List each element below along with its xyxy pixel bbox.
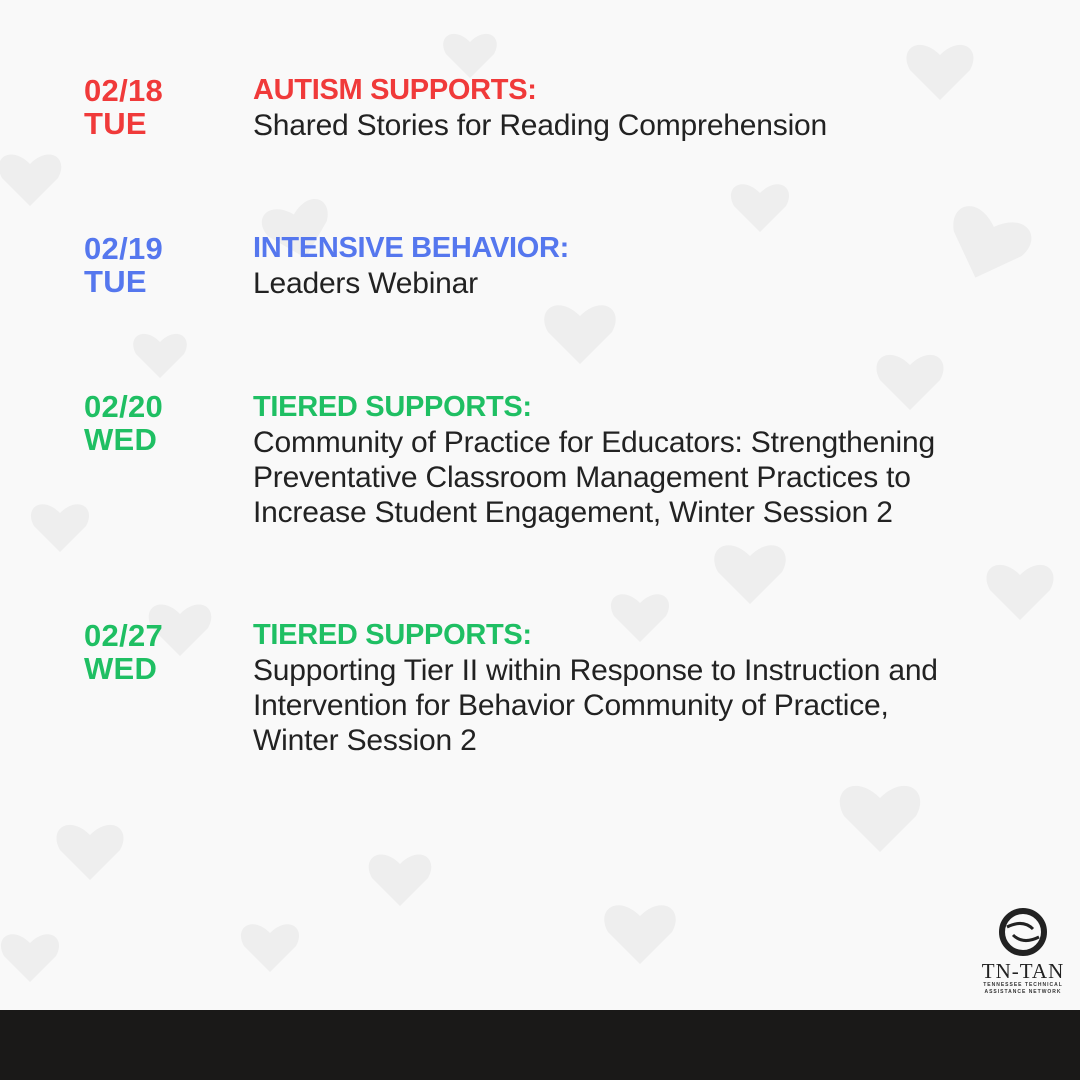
event 3: Increase Student Engagement, Winter Session 2	[253, 496, 893, 529]
event 4 date	[84, 618, 163, 686]
event 4 date: WED	[84, 651, 157, 686]
event 3: Community of Practice for Educators: Strengthening	[253, 426, 935, 459]
event 2: INTENSIVE BEHAVIOR:	[253, 232, 569, 264]
event 1 date: TUE	[84, 106, 147, 141]
logo: TN-TAN: TN-TAN	[982, 959, 1064, 983]
event 3 date: WED	[84, 422, 157, 457]
event 1 date: 02/18	[84, 73, 163, 108]
event 4	[253, 619, 938, 757]
event 4: Supporting Tier II within Response to Instruction and	[253, 654, 938, 687]
event 2: Leaders Webinar	[253, 267, 478, 300]
event 2 date: 02/19	[84, 231, 163, 266]
logo: TN-TAN: TENNESSEE TECHNICAL	[983, 982, 1063, 988]
event 3	[253, 391, 935, 529]
event 1	[253, 74, 827, 142]
event 4: TIERED SUPPORTS:	[253, 619, 532, 651]
event 3: Preventative Classroom Management Practices to	[253, 461, 911, 494]
event 2 date: TUE	[84, 264, 147, 299]
footer bar	[0, 1010, 1080, 1080]
event 4 date: 02/27	[84, 618, 163, 653]
event 4: Winter Session 2	[253, 724, 477, 757]
event 1 date	[84, 73, 163, 141]
logo: TN-TAN: ASSISTANCE NETWORK	[984, 989, 1062, 995]
event 1: AUTISM SUPPORTS:	[253, 74, 537, 106]
event 4: Intervention for Behavior Community of Practice,	[253, 689, 889, 722]
event 3 date: 02/20	[84, 389, 163, 424]
event 3 date	[84, 389, 163, 457]
event 2 date	[84, 231, 163, 299]
event 2	[253, 232, 569, 300]
event 3: TIERED SUPPORTS:	[253, 391, 532, 423]
logo: TN-TAN	[982, 908, 1064, 995]
event 1: Shared Stories for Reading Comprehension	[253, 109, 827, 142]
